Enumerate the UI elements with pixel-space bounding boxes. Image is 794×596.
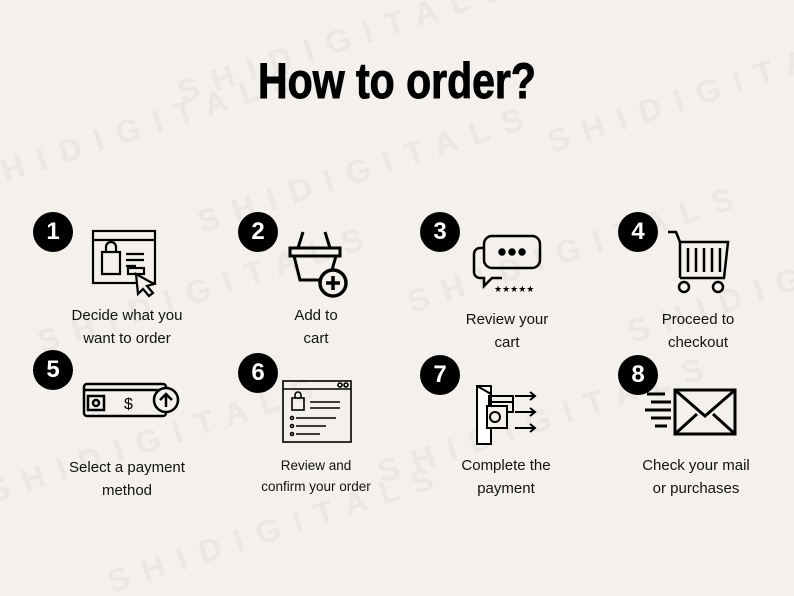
step 4 [618,212,734,351]
text 2 [294,307,338,347]
text 8: or purchases [653,480,739,497]
text 2: cart [303,330,328,347]
number 1: 1 [46,218,60,245]
number 3: 3 [433,218,447,245]
number 5 [33,350,73,390]
text: SHIDIGITALS [103,456,451,596]
text 7: Complete the [461,457,551,474]
text: SHIDIGITALS [373,346,721,490]
number 2: 2 [251,218,265,245]
number 7: 7 [433,361,447,388]
text: SHIDIGITALS [33,216,381,360]
step 1 [33,212,182,347]
text 1 [72,307,182,347]
icon: chat review [472,234,542,294]
text 4: Proceed to [662,311,734,328]
text 6 [261,458,371,494]
icon: basket plus [288,232,348,298]
number 6 [238,353,278,393]
title: How to order? [258,53,536,109]
text 5: Select a payment [69,459,185,476]
number 5: 5 [46,356,60,383]
number 4: 4 [631,218,645,245]
text 6: Review and [281,458,351,473]
text 3: cart [494,334,520,351]
number 8 [618,355,658,395]
number 8: 8 [631,361,645,388]
text 3 [466,311,548,351]
text 1: want to order [83,330,171,347]
icon: chat review: ★★★★★ [494,284,534,294]
icon: order window [282,380,352,443]
text 8 [642,457,750,497]
step 6 [238,353,371,494]
icon: payment [476,385,536,445]
text 3: Review your [466,311,548,328]
text 8: Check your mail [642,457,750,474]
text 5 [69,459,185,499]
number 2 [238,212,278,252]
text: SHIDIGITALS [403,176,751,320]
text 7 [461,457,551,497]
text: SHIDIGITALS [193,96,541,240]
step 7 [420,355,551,497]
step 5 [33,350,185,499]
icon: shopping cart [668,230,730,294]
text 2: Add to [294,307,338,324]
icon: envelope [645,388,736,436]
number 1 [33,212,73,252]
number 7 [420,355,460,395]
text 6: confirm your order [261,479,371,494]
text 7: payment [477,480,535,497]
number 6: 6 [251,359,265,386]
step 8 [618,355,750,497]
number 3 [420,212,460,252]
icon: wallet: $ [124,396,133,413]
text 4 [662,311,734,351]
text 5: method [102,482,152,499]
text 1: Decide what you [72,307,182,324]
icon: wallet [82,382,180,418]
step 2 [238,212,348,347]
icon: browser with bag [92,230,157,298]
text 4: checkout [668,334,728,351]
step 3 [420,212,548,351]
number 4 [618,212,658,252]
